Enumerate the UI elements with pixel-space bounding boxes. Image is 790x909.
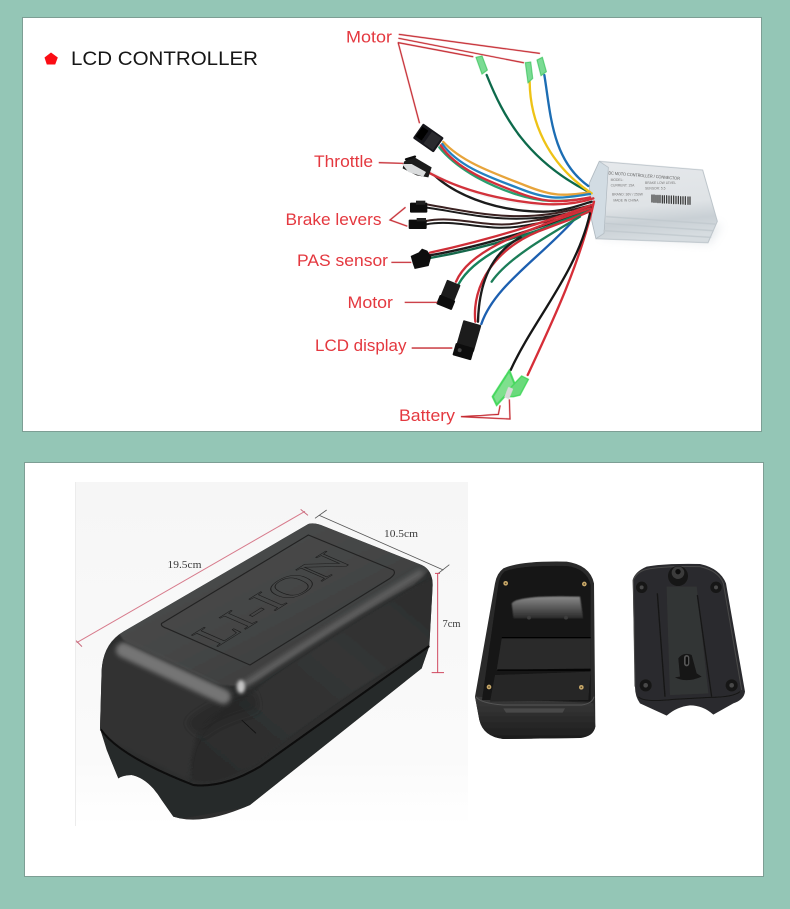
wires: motor phase [487,75,592,193]
connector: brake 1 [410,201,427,213]
labels: connector names: Throttle [314,153,373,171]
controller box: BRAND: 36V / 250W [612,193,644,197]
labels: connector names: Motor [346,28,393,46]
connector: LCD display [452,320,481,360]
dimension labels: 19.5cm [168,560,202,571]
dimension labels: 7cm [442,619,460,630]
labels: connector names: PAS sensor [297,252,389,270]
icon: box lid shell [633,564,745,716]
controller box: SENSOR: 5.5 [645,186,666,190]
wires: throttle [428,169,593,212]
photo: closed box with dimensions [75,482,468,826]
connector: lower motor [436,279,462,310]
connector: green bullets [476,56,546,83]
controller box: CURRENT: 15A [611,184,635,188]
wires: PAS sensor [430,205,592,258]
wires: lower motor and LCD [456,208,592,324]
heading: LCD CONTROLLER: LCD CONTROLLER [71,48,258,70]
controller box: DC MOTO CONTROLLER / CONNECTOR [608,170,680,181]
labels: connector names: Battery [399,407,456,425]
dimension labels [168,529,460,630]
labels: connector names: LCD display [315,337,407,355]
labels: connector names [286,28,456,425]
wires: brake levers [426,204,592,228]
connector: PAS sensor [411,249,431,269]
connector: throttle [402,157,432,177]
labels: connector names: Motor [348,294,394,312]
controller box: BRAKE LOW LEVEL [645,181,676,185]
controller box: MADE IN CHINA [613,198,639,202]
icon: box bottom shell [475,562,595,739]
dimension: length line [76,509,308,647]
photo: opened box halves [475,562,745,739]
dimension: width line [315,510,449,573]
controller box: MODEL: [611,178,623,182]
panel: LCD controller [22,18,762,432]
dimension: height line [432,573,444,673]
connector: brake 2 [409,218,427,229]
controller photo with wires [379,34,722,419]
icon: closed battery box [97,520,435,820]
raised lettering: LI-ION: LI-ION [181,546,362,651]
controller box [589,161,722,243]
panel: battery box [24,462,764,876]
barcode [652,195,690,204]
connector: top-left motor plug [413,123,444,153]
icon: red pentagon bullet [44,52,58,64]
callout leader lines [379,34,539,419]
wires: hall harness [439,142,590,201]
dimension labels: 10.5cm [384,529,418,540]
connector: battery terminals [493,371,528,405]
wires: battery [511,202,594,375]
labels: connector names: Brake levers [286,211,382,229]
